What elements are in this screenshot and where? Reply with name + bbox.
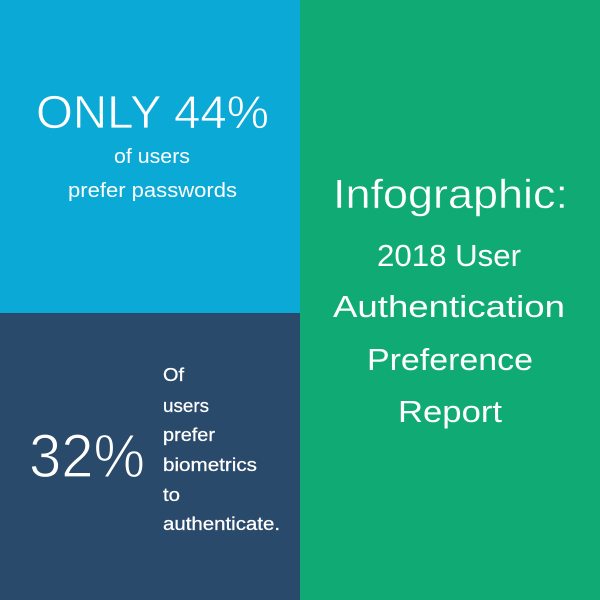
text: biometrics caption: users — [163, 396, 209, 416]
heading: infographic: Infographic: — [333, 171, 568, 217]
text: report name — [333, 238, 565, 429]
text: report name: Authentication — [333, 289, 565, 324]
stat: only 44%: ONLY 44% — [36, 86, 269, 138]
text: biometrics caption: prefer — [163, 425, 215, 445]
text: passwords caption: of users — [114, 146, 190, 168]
text: report name: Report — [398, 394, 502, 429]
panel: passwords — [0, 0, 300, 313]
stat: 32%: 32% — [29, 422, 145, 490]
panel: report title — [300, 0, 600, 600]
text: report name: 2018 User — [377, 238, 521, 273]
text: biometrics caption: biometrics — [163, 455, 257, 475]
text: biometrics caption: authenticate. — [163, 514, 280, 534]
panel: biometrics — [0, 313, 300, 600]
text: biometrics caption: Of — [163, 365, 185, 385]
text: biometrics caption: to — [163, 485, 180, 505]
text: report name: Preference — [367, 342, 533, 377]
text: passwords caption: prefer passwords — [68, 180, 237, 202]
text: biometrics caption — [163, 365, 280, 534]
text: passwords caption — [68, 146, 237, 202]
